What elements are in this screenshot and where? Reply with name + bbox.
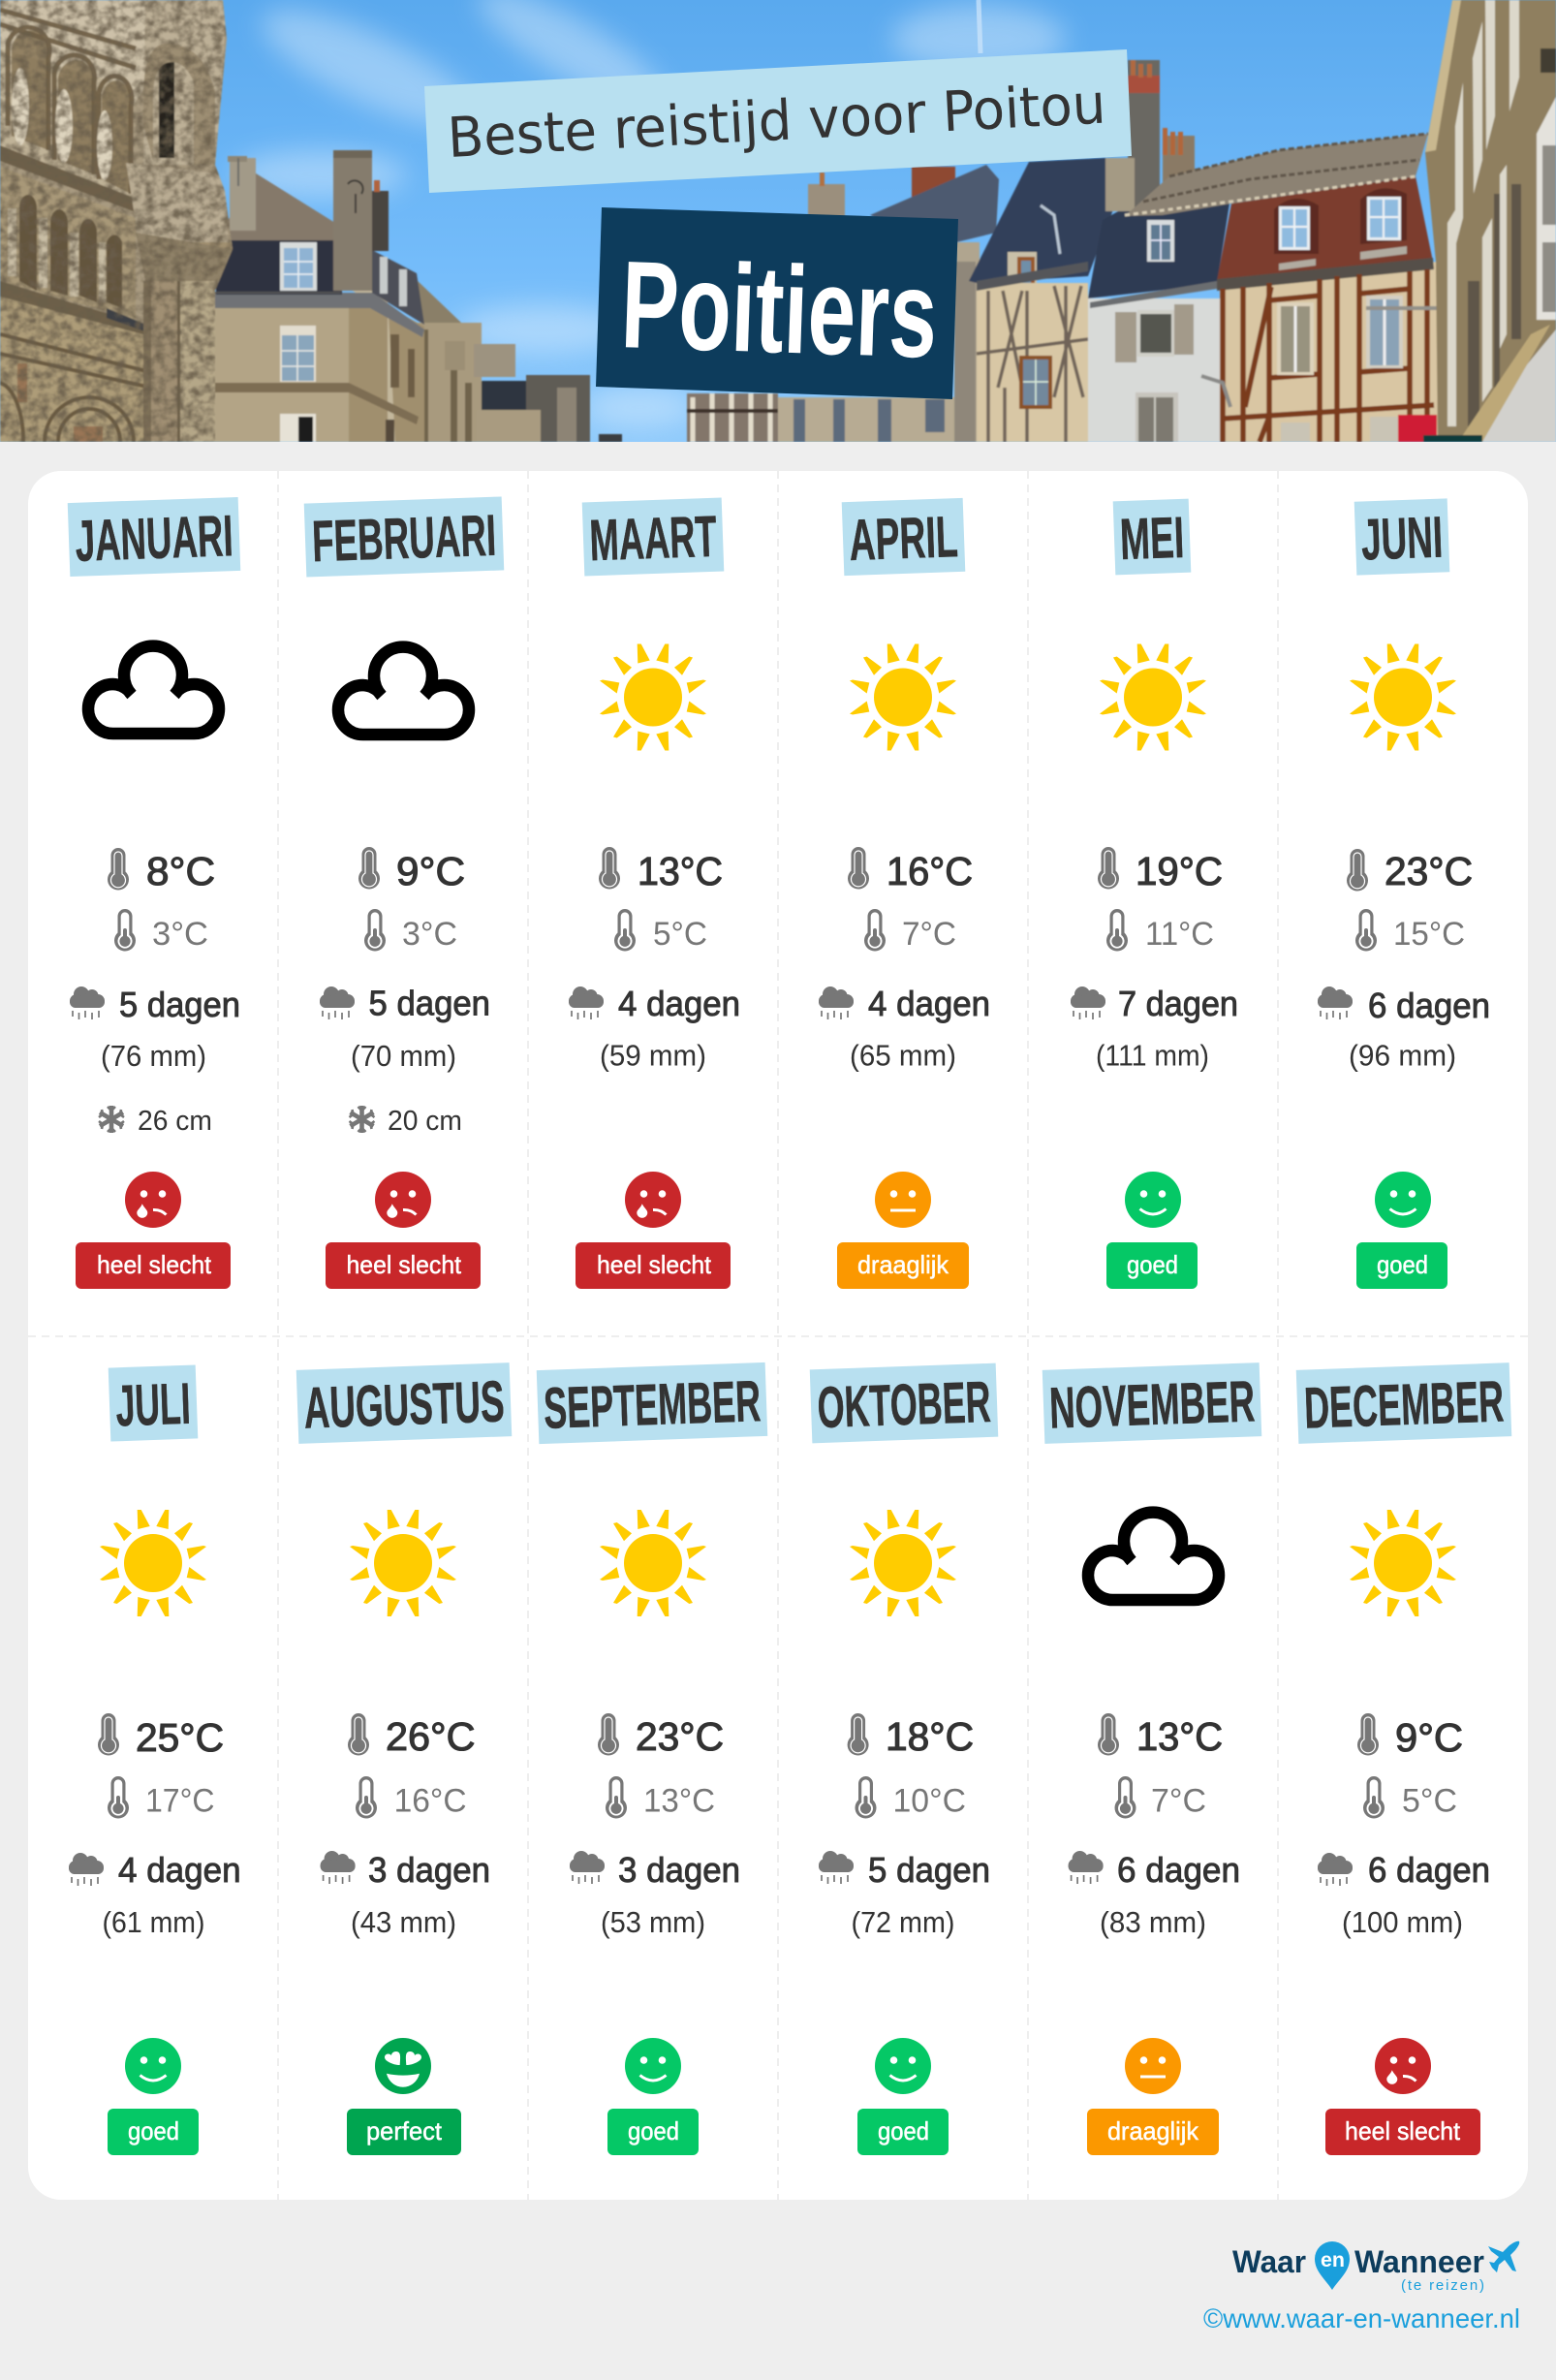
rating: goed: goed bbox=[128, 2116, 179, 2145]
rating: heel slecht bbox=[326, 1242, 481, 1289]
icon: thermometer low bbox=[1114, 1776, 1136, 1819]
rating: heel slecht: heel slecht bbox=[1345, 2116, 1461, 2145]
icon: sun bbox=[850, 643, 956, 750]
icon: rain bbox=[321, 1851, 356, 1884]
icon: cloud bbox=[88, 646, 219, 734]
upper arches bbox=[12, 30, 132, 194]
icon: crying face bbox=[375, 1172, 431, 1228]
icon: neutral face bbox=[875, 1172, 931, 1228]
logo wordmark: Wanneer: Wanneer bbox=[1354, 2244, 1484, 2279]
high temperature: 19°C bbox=[1136, 849, 1223, 893]
icon: sun bbox=[1350, 1510, 1456, 1616]
panel: oktober bbox=[810, 1363, 998, 2155]
month label: OKTOBER bbox=[810, 1363, 998, 1443]
rating: heel slecht: heel slecht bbox=[97, 1250, 212, 1279]
low temperature: 3°C bbox=[152, 916, 208, 953]
rain days: 6 dagen bbox=[1368, 986, 1490, 1025]
panel: januari bbox=[68, 497, 240, 1289]
icon: thermometer low bbox=[855, 1776, 876, 1819]
logo: Waar en Wanneer bbox=[1232, 2241, 1519, 2294]
icon: thermometer low bbox=[1363, 1776, 1385, 1819]
logo tagline: (te reizen) bbox=[1401, 2277, 1484, 2294]
distant roofs mid-left bbox=[0, 0, 1556, 442]
icon: thermometer low bbox=[606, 1776, 627, 1819]
icon: sun bbox=[600, 643, 706, 750]
rainfall: (76 mm) bbox=[101, 1039, 206, 1073]
rain days: 4 dagen bbox=[868, 984, 990, 1023]
low temperature: 16°C bbox=[394, 1783, 467, 1820]
icon: sun bbox=[600, 1510, 706, 1616]
rainfall: (100 mm) bbox=[1342, 1905, 1463, 1939]
tall chimney bbox=[1128, 60, 1160, 207]
rating: draaglijk bbox=[1087, 2109, 1219, 2155]
icon: plane bbox=[1488, 2241, 1519, 2272]
cathedral bbox=[0, 0, 233, 442]
month label: MEI: MEI bbox=[1119, 505, 1185, 572]
month label: MAART bbox=[582, 498, 724, 576]
icon: thermometer low bbox=[364, 909, 386, 952]
icon: rain bbox=[320, 986, 355, 1019]
icon: rain bbox=[1069, 1851, 1104, 1884]
center-right buildings bbox=[807, 183, 846, 215]
stone corner house bbox=[215, 298, 424, 442]
month label: MEI bbox=[1113, 499, 1191, 575]
high temperature: 13°C bbox=[1136, 1714, 1223, 1759]
rating: goed bbox=[1106, 1242, 1198, 1289]
logo pin: en bbox=[1315, 2241, 1350, 2290]
icon: cloud bbox=[1088, 1513, 1219, 1600]
panel: maart bbox=[569, 498, 740, 1289]
subtitle banner: Beste reistijd voor Poitou bbox=[424, 49, 1132, 193]
white house bbox=[1088, 298, 1220, 442]
antenna bbox=[237, 158, 239, 186]
icon: thermometer high bbox=[1098, 847, 1119, 890]
month label: AUGUSTUS: AUGUSTUS bbox=[302, 1368, 506, 1441]
panel: december bbox=[1296, 1362, 1511, 2155]
rainfall: (61 mm) bbox=[103, 1905, 205, 1939]
month label: JULI: JULI bbox=[114, 1371, 192, 1438]
windows on stone house bbox=[280, 326, 316, 382]
month label: SEPTEMBER: SEPTEMBER bbox=[543, 1368, 762, 1441]
panel: mei bbox=[1071, 499, 1238, 1289]
high temperature: 13°C bbox=[638, 849, 723, 893]
icon: thermometer high bbox=[1347, 849, 1368, 892]
title banner: Poitiers bbox=[596, 207, 958, 399]
icon: smiling face bbox=[1375, 1172, 1431, 1228]
high temperature: 26°C bbox=[386, 1714, 475, 1759]
icon: thermometer low bbox=[1355, 909, 1377, 952]
icon: snowflake bbox=[349, 1106, 374, 1133]
rating: goed: goed bbox=[628, 2116, 679, 2145]
icon: smiling face bbox=[875, 2038, 931, 2094]
right building bbox=[1425, 0, 1556, 442]
half timber below title bbox=[687, 393, 778, 442]
rating: goed: goed bbox=[878, 2116, 929, 2145]
rainfall: (111 mm) bbox=[1096, 1039, 1209, 1072]
icon: rain bbox=[819, 986, 854, 1019]
panel: juni bbox=[1318, 498, 1490, 1289]
low temperature: 11°C bbox=[1145, 916, 1214, 953]
icon: thermometer high bbox=[358, 847, 380, 890]
icon: thermometer low bbox=[614, 909, 636, 952]
icon: sun bbox=[850, 1510, 956, 1616]
logo pin: en: en bbox=[1321, 2249, 1345, 2271]
rating: goed bbox=[857, 2109, 949, 2155]
icon: crying face bbox=[1375, 2038, 1431, 2094]
snowfall: 26 cm bbox=[138, 1106, 212, 1137]
rating: perfect: perfect bbox=[366, 2116, 443, 2145]
rating: draaglijk bbox=[837, 1242, 969, 1289]
rain days: 6 dagen bbox=[1117, 1850, 1240, 1890]
high temperature: 16°C bbox=[887, 849, 973, 893]
low temperature: 3°C bbox=[402, 916, 457, 953]
title banner: Poitiers: Poitiers bbox=[619, 235, 940, 385]
icon: neutral face bbox=[1125, 2038, 1181, 2094]
rainfall: (53 mm) bbox=[601, 1905, 705, 1939]
lamp bbox=[1201, 376, 1230, 407]
icon: thermometer high bbox=[1098, 1713, 1119, 1756]
website credit: ©www.waar-en-wanneer.nl bbox=[1203, 2303, 1520, 2333]
month label: JANUARI: JANUARI bbox=[74, 503, 234, 574]
brick mansard bbox=[1217, 176, 1433, 281]
icon: thermometer high bbox=[599, 847, 620, 890]
rain days: 3 dagen bbox=[368, 1850, 490, 1890]
icon: sun bbox=[1100, 643, 1206, 750]
icon: thermometer high bbox=[1357, 1713, 1379, 1756]
high temperature: 8°C bbox=[146, 849, 215, 893]
low temperature: 7°C bbox=[902, 916, 956, 953]
icon: thermometer low bbox=[356, 1776, 377, 1819]
icon: thermometer high bbox=[108, 848, 129, 891]
panel: climate calendar card bbox=[28, 471, 1528, 2200]
snowfall: 20 cm bbox=[388, 1106, 462, 1137]
low temperature: 15°C bbox=[1393, 916, 1465, 953]
rain days: 4 dagen bbox=[618, 984, 740, 1023]
icon: thermometer high bbox=[348, 1713, 369, 1756]
icon: thermometer low bbox=[108, 1776, 129, 1819]
rain days: 7 dagen bbox=[1118, 984, 1238, 1023]
icon: thermometer high bbox=[98, 1713, 119, 1756]
icon: crying face bbox=[125, 1172, 181, 1228]
rainfall: (72 mm) bbox=[851, 1905, 955, 1939]
half-timbered house right bbox=[1220, 262, 1438, 442]
panel: februari bbox=[304, 496, 504, 1289]
panel: augustus bbox=[296, 1362, 512, 2155]
rating: goed bbox=[607, 2109, 699, 2155]
month label: OKTOBER: OKTOBER bbox=[816, 1369, 992, 1440]
icon: rain bbox=[569, 986, 604, 1019]
icon: rain bbox=[69, 1853, 104, 1886]
rating: goed bbox=[108, 2109, 199, 2155]
rainfall: (83 mm) bbox=[1100, 1905, 1206, 1939]
icon: rain bbox=[819, 1851, 854, 1884]
icon: sun bbox=[350, 1510, 456, 1616]
icon: smiling face bbox=[1125, 1172, 1181, 1228]
panel: april bbox=[819, 498, 990, 1289]
rainfall: (96 mm) bbox=[1349, 1039, 1456, 1072]
panel: november bbox=[1043, 1362, 1261, 2155]
low temperature: 10°C bbox=[893, 1783, 966, 1820]
icon: heart-eyes face bbox=[375, 2038, 431, 2094]
month label: APRIL: APRIL bbox=[848, 504, 959, 573]
rating: perfect bbox=[347, 2109, 461, 2155]
panel: juli bbox=[69, 1364, 241, 2155]
low temperature: 7°C bbox=[1151, 1783, 1206, 1820]
logo wordmark: Waar: Waar bbox=[1232, 2244, 1306, 2279]
icon: cloud bbox=[338, 647, 469, 735]
high temperature: 9°C bbox=[1395, 1715, 1463, 1760]
icon: rain bbox=[1318, 986, 1353, 1019]
rating: heel slecht: heel slecht bbox=[597, 1250, 712, 1279]
icon: rain bbox=[1071, 986, 1105, 1019]
rating: heel slecht bbox=[1325, 2109, 1480, 2155]
subtitle banner: Beste reistijd voor Poitou: Beste reistijd voor Poitou bbox=[446, 72, 1107, 171]
rain days: 5 dagen bbox=[119, 985, 240, 1024]
rain days: 4 dagen bbox=[118, 1850, 241, 1890]
low temperature: 17°C bbox=[145, 1783, 215, 1820]
low temperature: 5°C bbox=[653, 916, 707, 953]
panel: september bbox=[537, 1362, 767, 2155]
rating: heel slecht: heel slecht bbox=[347, 1250, 462, 1279]
icon: smiling face bbox=[625, 2038, 681, 2094]
rain days: 3 dagen bbox=[618, 1850, 740, 1890]
month label: MAART: MAART bbox=[588, 504, 718, 573]
month label: NOVEMBER: NOVEMBER bbox=[1048, 1368, 1256, 1441]
high temperature: 18°C bbox=[886, 1714, 974, 1759]
rainfall: (59 mm) bbox=[600, 1039, 706, 1072]
tower bbox=[143, 0, 227, 165]
icon: thermometer high bbox=[598, 1713, 619, 1756]
rating: goed: goed bbox=[1377, 1250, 1428, 1279]
rainfall: (65 mm) bbox=[850, 1039, 956, 1072]
month label: JULI bbox=[109, 1364, 198, 1442]
icon: smiling face bbox=[125, 2038, 181, 2094]
month label: APRIL bbox=[842, 498, 965, 576]
rain days: 5 dagen bbox=[368, 983, 490, 1023]
rating: goed bbox=[1356, 1242, 1447, 1289]
icon: thermometer high bbox=[848, 1713, 869, 1756]
low temperature: 13°C bbox=[643, 1783, 715, 1820]
photo: Poitiers street with cathedral and half-timbered houses bbox=[0, 0, 1556, 442]
icon: rain bbox=[1318, 1853, 1353, 1886]
rating: heel slecht bbox=[76, 1242, 231, 1289]
high temperature: 23°C bbox=[636, 1714, 724, 1759]
icon: thermometer low bbox=[1106, 909, 1128, 952]
month label: AUGUSTUS bbox=[296, 1362, 512, 1444]
rain days: 6 dagen bbox=[1368, 1850, 1490, 1890]
high temperature: 25°C bbox=[136, 1715, 224, 1760]
rainfall: (43 mm) bbox=[351, 1905, 456, 1939]
roof bbox=[223, 172, 339, 242]
month label: FEBRUARI bbox=[304, 496, 504, 578]
month label: JUNI bbox=[1354, 498, 1449, 576]
icon: thermometer high bbox=[848, 847, 869, 890]
rain days: 5 dagen bbox=[868, 1850, 990, 1890]
icon: rain bbox=[70, 986, 105, 1019]
rainfall: (70 mm) bbox=[351, 1039, 456, 1073]
rating: draaglijk: draaglijk bbox=[857, 1250, 949, 1279]
month label: JANUARI bbox=[68, 497, 240, 577]
month label: SEPTEMBER bbox=[537, 1362, 767, 1444]
low temperature: 5°C bbox=[1402, 1783, 1457, 1820]
month label: JUNI: JUNI bbox=[1360, 505, 1444, 572]
rating: draaglijk: draaglijk bbox=[1107, 2116, 1199, 2145]
high temperature: 23°C bbox=[1385, 849, 1473, 893]
icon: sun bbox=[1350, 643, 1456, 750]
rating: goed: goed bbox=[1127, 1250, 1178, 1279]
icon: snowflake bbox=[99, 1106, 124, 1133]
icon: thermometer low bbox=[864, 909, 886, 952]
icon: rain bbox=[570, 1851, 605, 1884]
icon: thermometer low bbox=[114, 909, 136, 952]
icon: sun bbox=[100, 1510, 206, 1616]
rating: heel slecht bbox=[576, 1242, 731, 1289]
month label: FEBRUARI: FEBRUARI bbox=[311, 503, 497, 574]
high temperature: 9°C bbox=[396, 849, 465, 893]
month label: NOVEMBER bbox=[1043, 1362, 1261, 1444]
icon: crying face bbox=[625, 1172, 681, 1228]
